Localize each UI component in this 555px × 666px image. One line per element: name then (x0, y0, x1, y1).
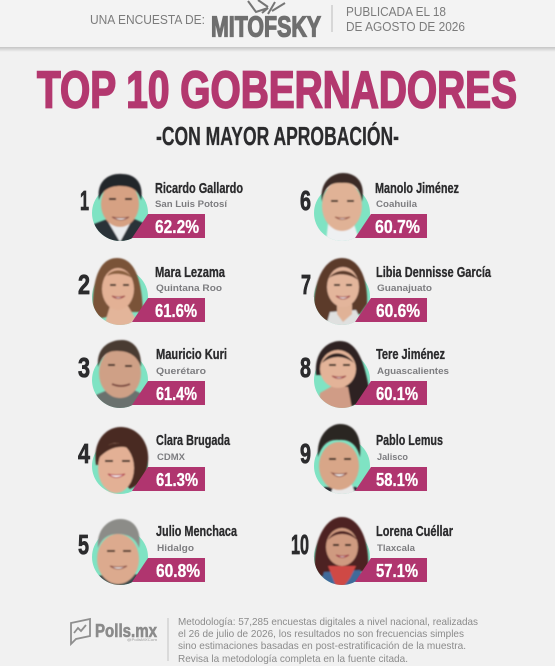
rank 1: Ricardo Gallardo: San Luis Potosí (155, 199, 227, 210)
rank 5: Julio Menchaca: Hidalgo (157, 543, 194, 554)
rank 6: Manolo Jiménez: Manolo Jiménez (375, 181, 459, 197)
footer: methodology note: Revisa la metodología completa en la fuente citada. (178, 653, 408, 665)
rank 2: Mara Lezama: 61.6% (155, 300, 197, 321)
rank 5: Julio Menchaca (78, 519, 238, 586)
rank 8: Tere Jiménez: 60.1% (376, 383, 418, 404)
rank 1: Ricardo Gallardo: Ricardo Gallardo (155, 181, 243, 197)
rank 8: Tere Jiménez (300, 341, 449, 409)
rank 4: Clara Brugada: CDMX (157, 452, 186, 463)
rank 5: Julio Menchaca: 60.8% (156, 560, 200, 581)
icon: Mitofsky bird logo (248, 0, 285, 14)
rank 10: Lorena Cuéllar: Lorena Cuéllar (376, 524, 453, 540)
logo: Mitofsky: MITOFSKY (211, 12, 321, 44)
rank 3: Mauricio Kuri: Mauricio Kuri (156, 347, 227, 363)
rank 10: Lorena Cuéllar: 57.1% (376, 560, 418, 581)
rank 9: Pablo Lemus: 58.1% (376, 469, 418, 490)
publication date: PUBLICADA EL 18 (346, 4, 446, 19)
rank 7: Libia Dennisse García: Libia Dennisse García (376, 265, 492, 281)
rank 6: Manolo Jiménez (300, 173, 459, 242)
rank 4: Clara Brugada (78, 427, 231, 494)
rank 3: Mauricio Kuri: Querétaro (156, 366, 206, 377)
rank 9: Pablo Lemus: Jalisco (377, 452, 408, 463)
icon: chart speech bubble (71, 619, 90, 644)
rank 7: Libia Dennisse García: 60.6% (376, 300, 420, 321)
rank 8: Tere Jiménez: Aguascalientes (377, 366, 449, 377)
rank 6: Manolo Jiménez: Coahuila (376, 199, 418, 210)
publication date (346, 4, 465, 34)
rank 7: Libia Dennisse García: Guanajuato (377, 283, 432, 294)
footer: methodology note: sino estimaciones basadas en post-estratificación de la muestra. (178, 640, 466, 652)
rank 2: Mara Lezama: Quintana Roo (156, 283, 222, 294)
rank 10: Lorena Cuéllar: Tlaxcala (377, 543, 416, 554)
rank 10: Lorena Cuéllar (291, 517, 453, 586)
rank 9: Pablo Lemus: 9 (300, 438, 311, 469)
rank 6: Manolo Jiménez: 60.7% (375, 216, 420, 237)
rank 2: Mara Lezama (78, 258, 226, 326)
rank 9: Pablo Lemus: Pablo Lemus (376, 433, 443, 449)
rank 7: Libia Dennisse García (301, 258, 492, 326)
rank 1: Ricardo Gallardo: 1 (80, 185, 89, 216)
footer: Polls.mx logo: @PollsMXCom (127, 638, 157, 642)
footer: methodology note: el 26 de julio de 2026, los resultados no son frecuencias simples (178, 628, 464, 640)
rank 9: Pablo Lemus (300, 424, 443, 495)
footer: Polls.mx logo (71, 619, 157, 644)
rank 3: Mauricio Kuri (78, 340, 227, 409)
rank 5: Julio Menchaca: Julio Menchaca (156, 524, 238, 540)
label: una encuesta de: UNA ENCUESTA DE: (90, 12, 205, 27)
rank 8: Tere Jiménez: Tere Jiménez (376, 347, 445, 363)
rank 2: Mara Lezama: 2 (78, 269, 90, 300)
subtitle: -CON MAYOR APROBACIÓN- (156, 121, 399, 151)
footer: methodology note (178, 616, 478, 665)
footer: methodology note: Metodología: 57,285 encuestas digitales a nivel nacional, realizadas (178, 616, 478, 628)
rank 8: Tere Jiménez: 8 (300, 352, 311, 383)
rank 7: Libia Dennisse García: 7 (301, 269, 311, 300)
rank 10: Lorena Cuéllar: 10 (291, 529, 309, 560)
rank 5: Julio Menchaca: 5 (78, 529, 89, 560)
rank 4: Clara Brugada: Clara Brugada (156, 433, 231, 449)
publication date: DE AGOSTO DE 2026 (346, 19, 465, 34)
rank 2: Mara Lezama: Mara Lezama (155, 265, 226, 281)
rank 1: Ricardo Gallardo: 62.2% (155, 216, 199, 237)
rank 1: Ricardo Gallardo (80, 174, 243, 242)
rank 6: Manolo Jiménez: 6 (300, 185, 311, 216)
header: survey source (90, 0, 465, 44)
rank 4: Clara Brugada: 4 (78, 438, 90, 469)
rank 3: Mauricio Kuri: 61.4% (156, 383, 197, 404)
rank 3: Mauricio Kuri: 3 (78, 352, 90, 383)
footer: Polls.mx logo: Polls.mx (95, 621, 157, 641)
rank 4: Clara Brugada: 61.3% (156, 469, 198, 490)
